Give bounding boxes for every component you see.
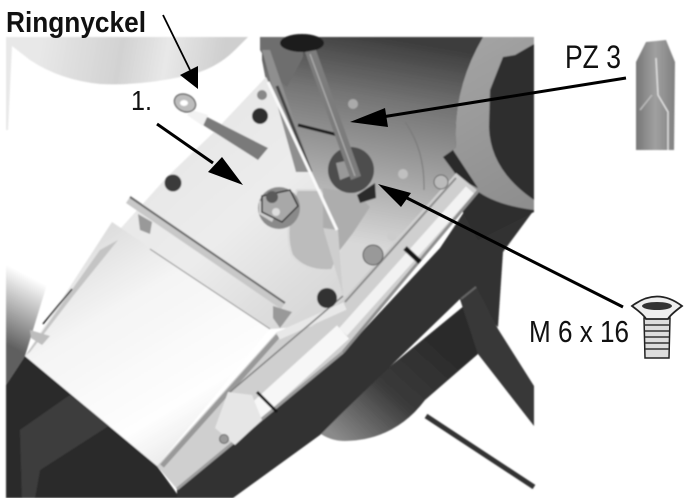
- tower back plate: [262, 37, 483, 326]
- tool strip: [262, 50, 312, 172]
- label: PZ 3: PZ 3: [565, 39, 621, 75]
- upper plate: [103, 77, 345, 329]
- plate screws: [252, 108, 268, 124]
- panel side bracket: [25, 240, 118, 356]
- arrow: step 1: [157, 124, 243, 185]
- hinge bar: [126, 197, 285, 309]
- ring opening around bolt: [288, 190, 345, 270]
- centre bolt: [258, 187, 300, 229]
- flap: [260, 37, 303, 87]
- PZ 3 bit icon: [636, 40, 675, 150]
- label: step 1: 1.: [131, 85, 152, 116]
- bowl: [318, 305, 478, 441]
- black cable: [298, 125, 338, 135]
- arrow: M 6 x 16: [378, 184, 623, 307]
- photo of machine: [6, 34, 534, 498]
- tube flare: [215, 392, 262, 445]
- silver rail: [157, 173, 478, 489]
- glove: [6, 37, 248, 130]
- rod: [426, 416, 534, 487]
- label: M 6 x 16: M 6 x 16: [529, 314, 629, 349]
- dark body: [177, 191, 534, 498]
- left cylinder: [6, 225, 52, 385]
- dark disk: [328, 147, 374, 193]
- wrench: [203, 117, 268, 160]
- lower panel: [25, 222, 270, 466]
- dark lower housing: [6, 356, 180, 498]
- fin: [460, 286, 534, 426]
- upper right dark cavity: [300, 37, 534, 240]
- arrow: Ringnyckel: [163, 15, 198, 89]
- label: Ringnyckel: Ringnyckel: [6, 7, 146, 39]
- arrow: PZ 3: [350, 78, 626, 127]
- gray ring: [445, 37, 534, 210]
- M6 screw icon: [632, 296, 682, 358]
- screwdriver shaft: [305, 50, 361, 180]
